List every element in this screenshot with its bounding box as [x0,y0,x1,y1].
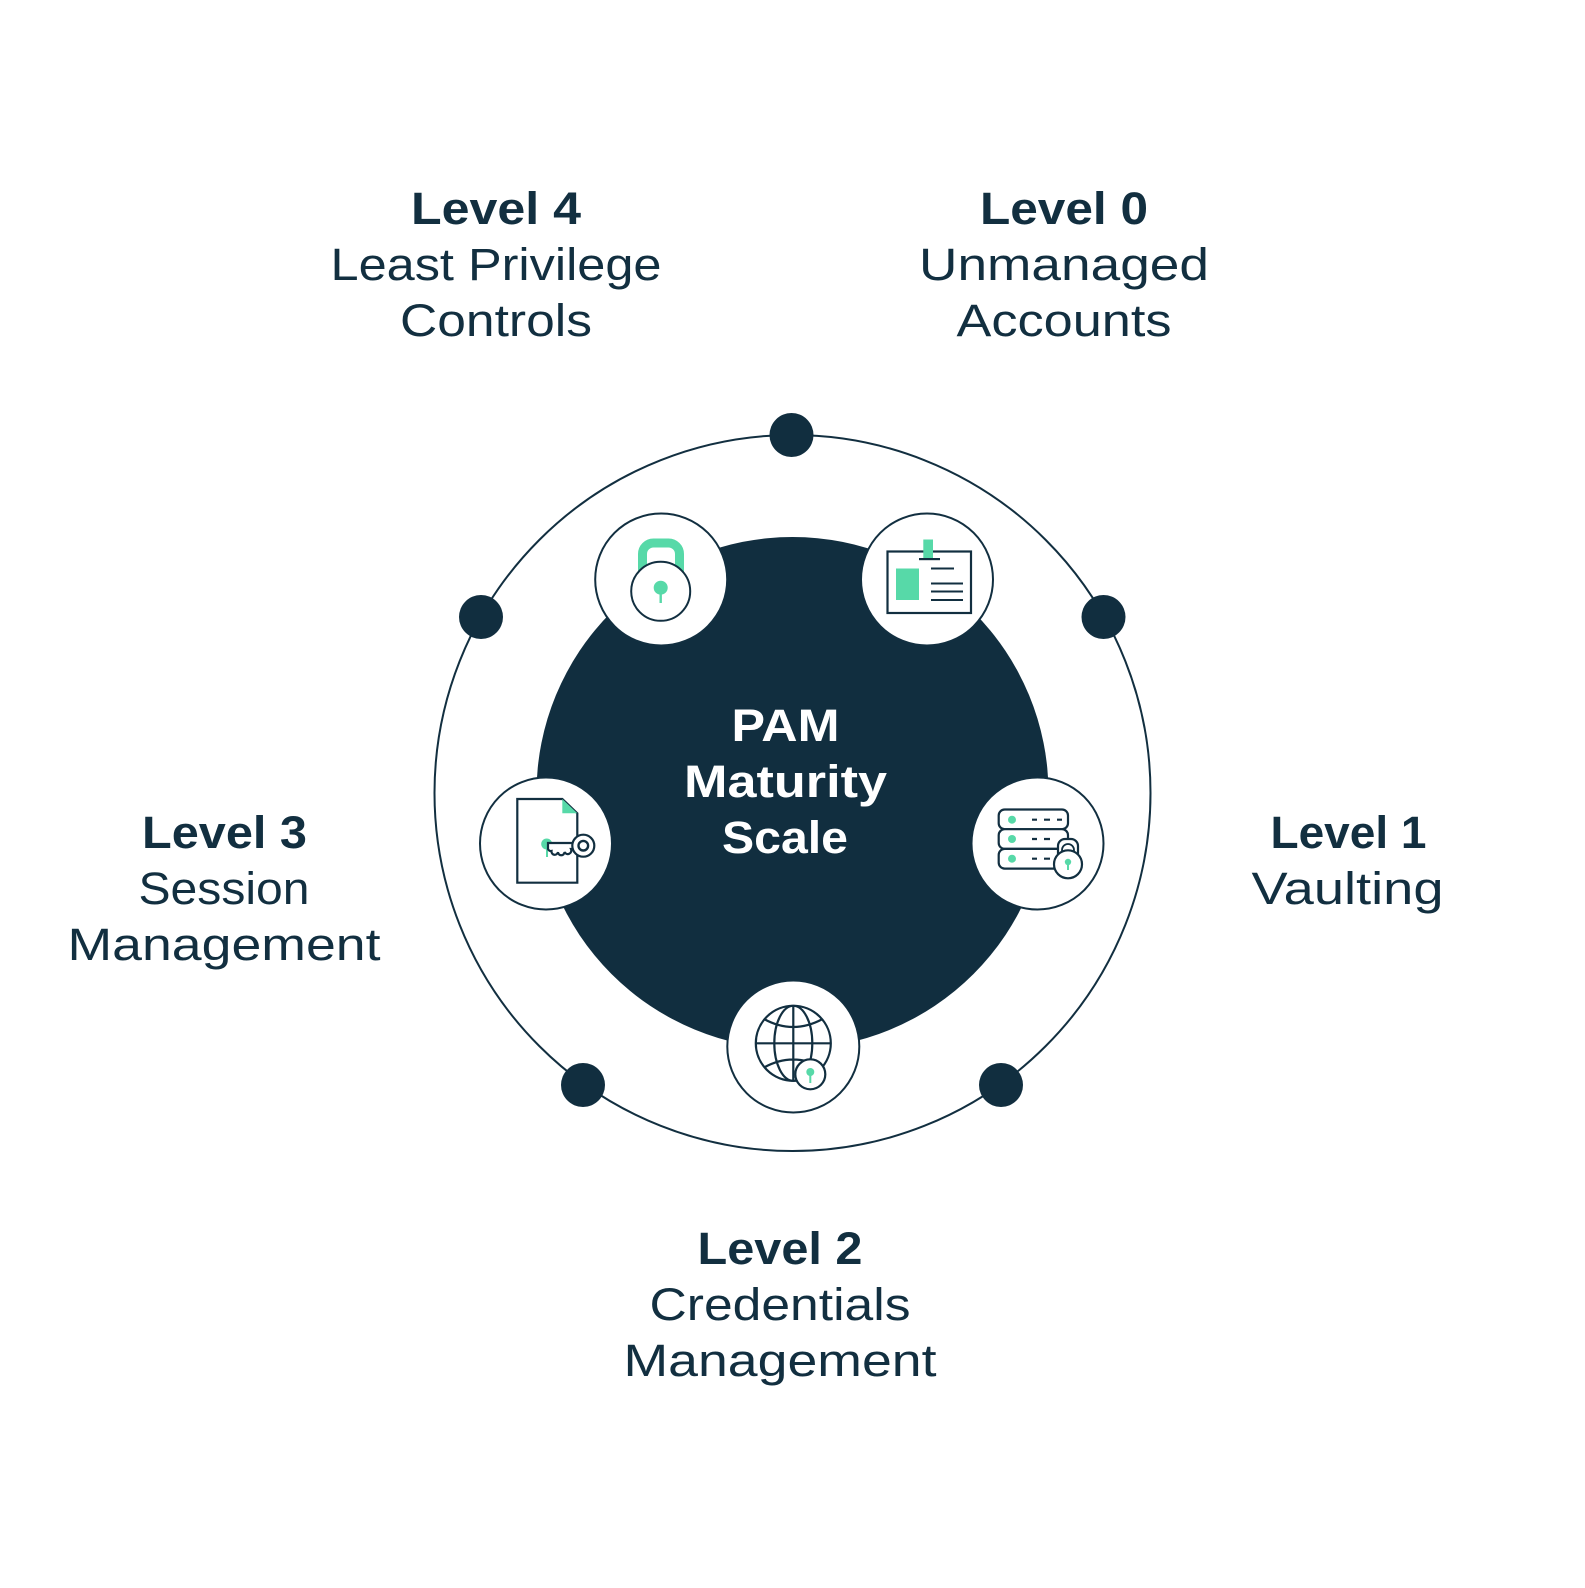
center title: Scale [722,812,848,863]
icon: document with key [480,778,612,910]
label: Level 0: Unmanaged [919,239,1209,290]
label: Level 4: Controls [400,295,592,346]
icon: padlock [595,514,727,646]
label: Level 4: Least Privilege [330,239,662,290]
label: Level 3: Session [138,863,310,914]
label: Level 4 [330,183,662,346]
label: Level 2: Management [624,1335,937,1386]
center title: PAM [732,700,840,751]
label: Level 1: Level 1 [1270,807,1426,858]
label: Level 2: Level 2 [698,1223,862,1274]
central dark circle [536,537,1048,1049]
icon: ID card [861,514,993,646]
icon: globe with lock [727,980,859,1112]
label: Level 4: Level 4 [411,183,581,234]
label: Level 2: Credentials [650,1279,910,1330]
label: Level 3 [68,807,381,970]
outer ring [434,435,1150,1151]
center title [684,700,887,863]
label: Level 3: Level 3 [142,807,307,858]
icon: server with lock [972,778,1104,910]
label: Level 1: Vaulting [1252,863,1444,914]
label: Level 2 [624,1223,937,1386]
label: Level 0: Accounts [956,295,1172,346]
label: Level 0 [919,183,1209,346]
center title: Maturity [684,756,887,807]
label: Level 0: Level 0 [980,183,1148,234]
label: Level 1 [1252,807,1444,914]
ring marker dots [459,413,1126,1107]
label: Level 3: Management [68,919,381,970]
